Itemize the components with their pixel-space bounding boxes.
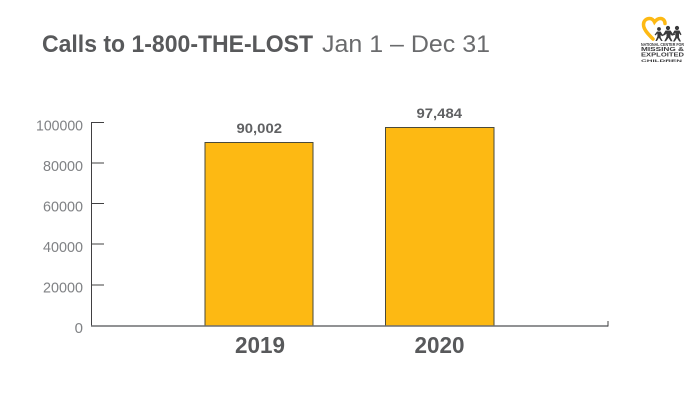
logo wordmark: CHILDREN <box>641 58 682 63</box>
value label: 90,002: 90,002 <box>236 120 282 136</box>
title <box>42 31 490 58</box>
bar: 2019 <box>205 142 313 326</box>
y axis labels: 60000 <box>43 198 83 216</box>
y axis labels: 20000 <box>43 280 83 296</box>
icon: heart <box>644 18 665 39</box>
title: Jan 1 – Dec 31 <box>322 31 490 58</box>
y axis labels: 0 <box>75 320 83 337</box>
logo wordmark: MISSING & <box>641 47 684 53</box>
y axis labels <box>36 118 83 337</box>
icon: children silhouettes <box>655 26 682 42</box>
category label: 2020: 2020 <box>414 332 464 358</box>
axes <box>91 122 608 326</box>
bar: 2020 <box>386 128 494 326</box>
y axis labels: 40000 <box>43 239 83 256</box>
y axis labels: 80000 <box>43 158 83 175</box>
logo wordmark: NATIONAL CENTER FOR <box>641 42 684 47</box>
category label: 2019: 2019 <box>235 332 285 358</box>
logo wordmark <box>641 42 684 63</box>
y axis labels: 100000 <box>36 118 83 134</box>
title: Calls to 1-800-THE-LOST <box>42 31 313 58</box>
logo wordmark: EXPLOITED <box>641 52 684 58</box>
value label: 97,484: 97,484 <box>416 105 462 121</box>
logo <box>641 18 684 63</box>
